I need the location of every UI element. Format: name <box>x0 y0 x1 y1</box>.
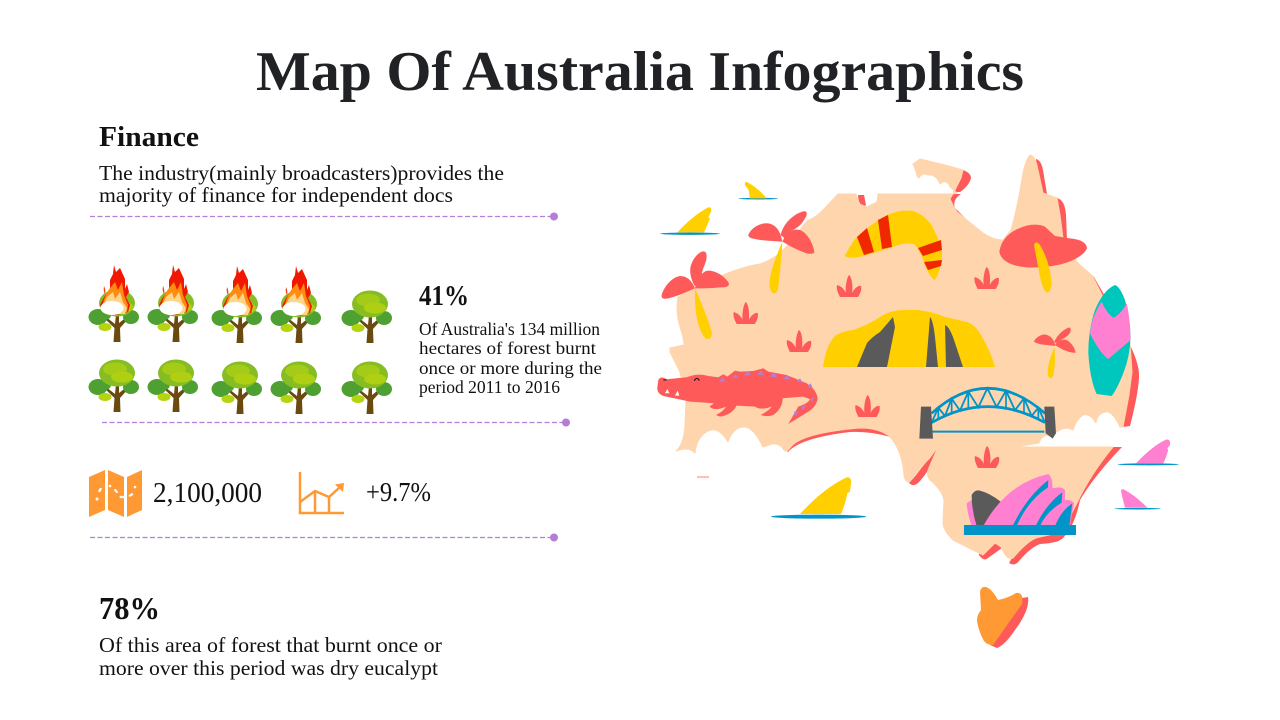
stat: 2,100,000: 2,100,000 <box>153 478 262 509</box>
41% description: hectares of forest burnt <box>419 338 596 358</box>
41% description <box>419 319 602 397</box>
number: 78%: 78% <box>99 590 160 626</box>
icon: growth chart <box>300 472 344 513</box>
icon: shark fin pink lower <box>1114 489 1161 509</box>
icon: folded map <box>89 470 142 517</box>
stat: 78% <box>99 590 442 680</box>
map landmass <box>670 155 1132 558</box>
finance description: majority of finance for independent docs <box>99 183 453 207</box>
title: Map Of Australia Infographics <box>256 41 1024 103</box>
78% description <box>99 633 442 680</box>
78% description: Of this area of forest that burnt once or <box>99 633 442 657</box>
finance description: The industry(mainly broadcasters)provides the <box>99 161 504 185</box>
41% description: Of Australia's 134 million <box>419 319 600 339</box>
icon: shark fin small yellow <box>738 182 778 199</box>
finance description <box>99 161 504 207</box>
map of Australia <box>670 155 1139 648</box>
icon: boomerang <box>845 211 942 280</box>
divider 1 <box>90 212 558 220</box>
icon: palm tree top <box>748 211 814 293</box>
number: 41%: 41% <box>419 281 469 312</box>
icon: Uluru rock <box>823 310 995 367</box>
water bits <box>697 476 709 478</box>
icon: large palm <box>999 225 1087 293</box>
tree pictogram: 4 of 10 trees burning <box>88 265 392 414</box>
icon: shark fin yellow bottom <box>771 477 866 519</box>
divider 2 <box>102 418 570 426</box>
text block: finance <box>99 122 504 207</box>
icon: Sydney Opera House <box>964 474 1076 535</box>
stat: +9.7%: +9.7% <box>366 477 431 507</box>
divider 3 <box>90 534 558 542</box>
stat: 41% <box>419 281 602 397</box>
icon: crocodile <box>657 368 818 424</box>
icon: harbour bridge <box>919 388 1056 439</box>
icon: small palm <box>1034 327 1076 378</box>
78% description: more over this period was dry eucalypt <box>99 656 438 680</box>
41% description: once or more during the <box>419 358 602 378</box>
icon: palm tree left <box>662 251 729 339</box>
Tasmania <box>977 587 1028 648</box>
map shadow edges <box>783 159 1139 564</box>
heading: finance: Finance <box>99 122 199 153</box>
41% description: period 2011 to 2016 <box>419 377 560 397</box>
icon: shark fin yellow left <box>660 207 720 235</box>
icon: grass tufts <box>733 267 999 468</box>
icon: surfboard <box>1088 285 1131 396</box>
icon: shark fin pink upper <box>1118 439 1179 465</box>
